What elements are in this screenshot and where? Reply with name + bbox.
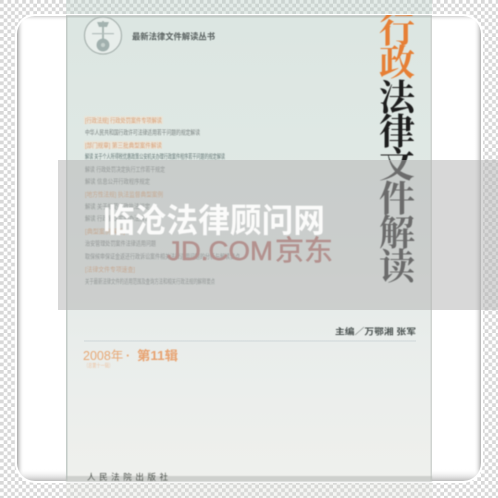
text block: table of contents: 治安管理处罚案件法律适用问题 [85, 238, 156, 248]
watermark: JD.COM logo: JD.COM [167, 236, 273, 266]
issue label: · [126, 349, 130, 363]
watermark: JD chinese mark: 京东 [275, 235, 333, 266]
text block: table of contents: [法律文件专项速查] [85, 264, 135, 274]
translucent grey band [58, 160, 498, 310]
text block: table of contents: 中华人民共和国行政许可法律适用若干问题的规定解读 [85, 128, 200, 136]
vertical book title [379, 15, 415, 284]
issue label: 第11辑 [137, 348, 179, 363]
text block: table of contents: 解读 行政复议实施办法解读 [85, 214, 150, 222]
series title: 最新法律文件解读丛书 [132, 32, 216, 42]
text block: table of contents: [行政法规] 行政处罚案件专项解读 [85, 116, 162, 124]
publisher: 人民法院出版社 [87, 472, 168, 482]
issue label: 2008年 [83, 349, 123, 363]
vertical book title: 解 [379, 213, 415, 253]
text block: table of contents: 解读 信息公开行政程序规定 [85, 176, 150, 186]
text block: table of contents: [部门规章] 第三批典型案件解读 [85, 140, 163, 150]
rule under editors [84, 340, 416, 342]
vertical book title: 读 [379, 247, 417, 287]
panel: book cover [66, 0, 432, 498]
vertical book title: 文 [379, 145, 415, 185]
editors line: 主编／万鄂湘 张军 [335, 326, 416, 336]
text block: table of contents: [地方性法规] 执法监督典型案例 [85, 190, 163, 198]
text block: table of contents [84, 116, 240, 286]
vertical book title: 件 [379, 179, 415, 219]
text block: table of contents: 解读 关于个人所得税优惠政策公安机关办理行政案件程序若干问题的规定解读 [85, 152, 225, 160]
vertical book title: 律 [379, 112, 415, 152]
text block: table of contents: [典型案例解析] [85, 226, 125, 236]
watermark: JD.COM logo [167, 235, 333, 266]
issue sub-label: （总第十一辑） [84, 362, 113, 370]
text block: table of contents: 关于最新法律文件的适用范围及查询方法和相关行政法规的解释要点 [85, 276, 215, 286]
vertical book title: 行 [379, 10, 415, 50]
icon: court emblem [84, 17, 122, 54]
text block: table of contents: 解读 关于规范行政执法规定 [85, 202, 150, 210]
text block: table of contents: 解读 行政处罚决定执行工作若干规定 [85, 164, 165, 174]
site title overlay: 临沧法律顾问网 [103, 194, 325, 242]
vertical book title: 法 [379, 78, 418, 118]
vertical book title: 政 [379, 43, 415, 83]
issue label [83, 348, 179, 370]
text block: table of contents: 取保候审保证金返还行政诉讼案件相关法律适用问题的分析与解读要点 [85, 252, 240, 260]
